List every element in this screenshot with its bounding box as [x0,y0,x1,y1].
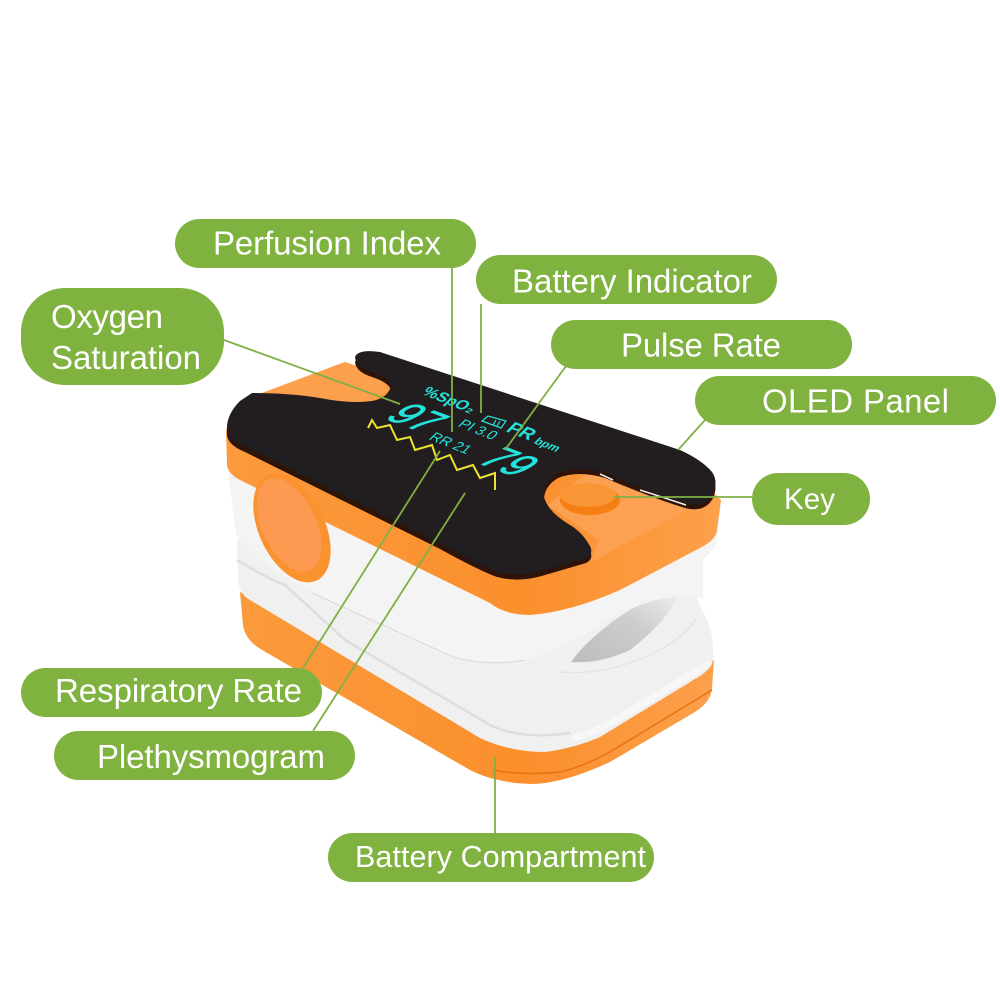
bpm label: bpm [531,435,564,454]
pulse oximeter device [226,351,721,784]
label: Pulse Rate: Pulse Rate [621,326,781,364]
label: Oxygen Saturation [21,288,224,385]
power key [560,483,620,515]
SpO2 label: %SpO₂ [418,385,480,416]
label: Pulse Rate [551,320,852,369]
battery icon [482,416,506,428]
label: Key: Key [784,483,835,516]
label: Battery Indicator: Battery Indicator [512,262,752,300]
label: Perfusion Index: Perfusion Index [213,224,442,262]
label: Battery Compartment: Battery Compartment [355,840,647,874]
side clip button [238,461,346,595]
lower white body [237,500,713,752]
lower orange battery shell [240,592,714,784]
waveform [368,420,495,490]
label: Battery Indicator [476,255,777,304]
label: Key [752,473,870,525]
label: Oxygen Saturation: Saturation [51,339,201,376]
label: OLED Panel [695,376,996,425]
upper orange shell [226,362,721,615]
PI value: PI 3.0 [454,417,501,443]
label: Perfusion Index [175,219,476,268]
label: Plethysmogram: Plethysmogram [97,738,325,775]
PR label: PR [501,419,541,444]
label: Plethysmogram [54,731,355,780]
label: Battery Compartment [328,833,654,882]
leader lines [224,268,752,833]
RR value: RR 21 [425,430,475,457]
label: Respiratory Rate: Respiratory Rate [55,672,302,709]
oled readout [368,385,564,490]
pulse rate value: 79 [465,442,552,482]
finger opening [571,597,677,662]
black OLED panel [227,351,715,580]
label: Oxygen Saturation: Oxygen [51,298,163,335]
label: Respiratory Rate [21,668,322,717]
upper white body [228,470,721,662]
SpO2 value: 97 [373,398,460,438]
label: OLED Panel: OLED Panel [762,382,949,420]
